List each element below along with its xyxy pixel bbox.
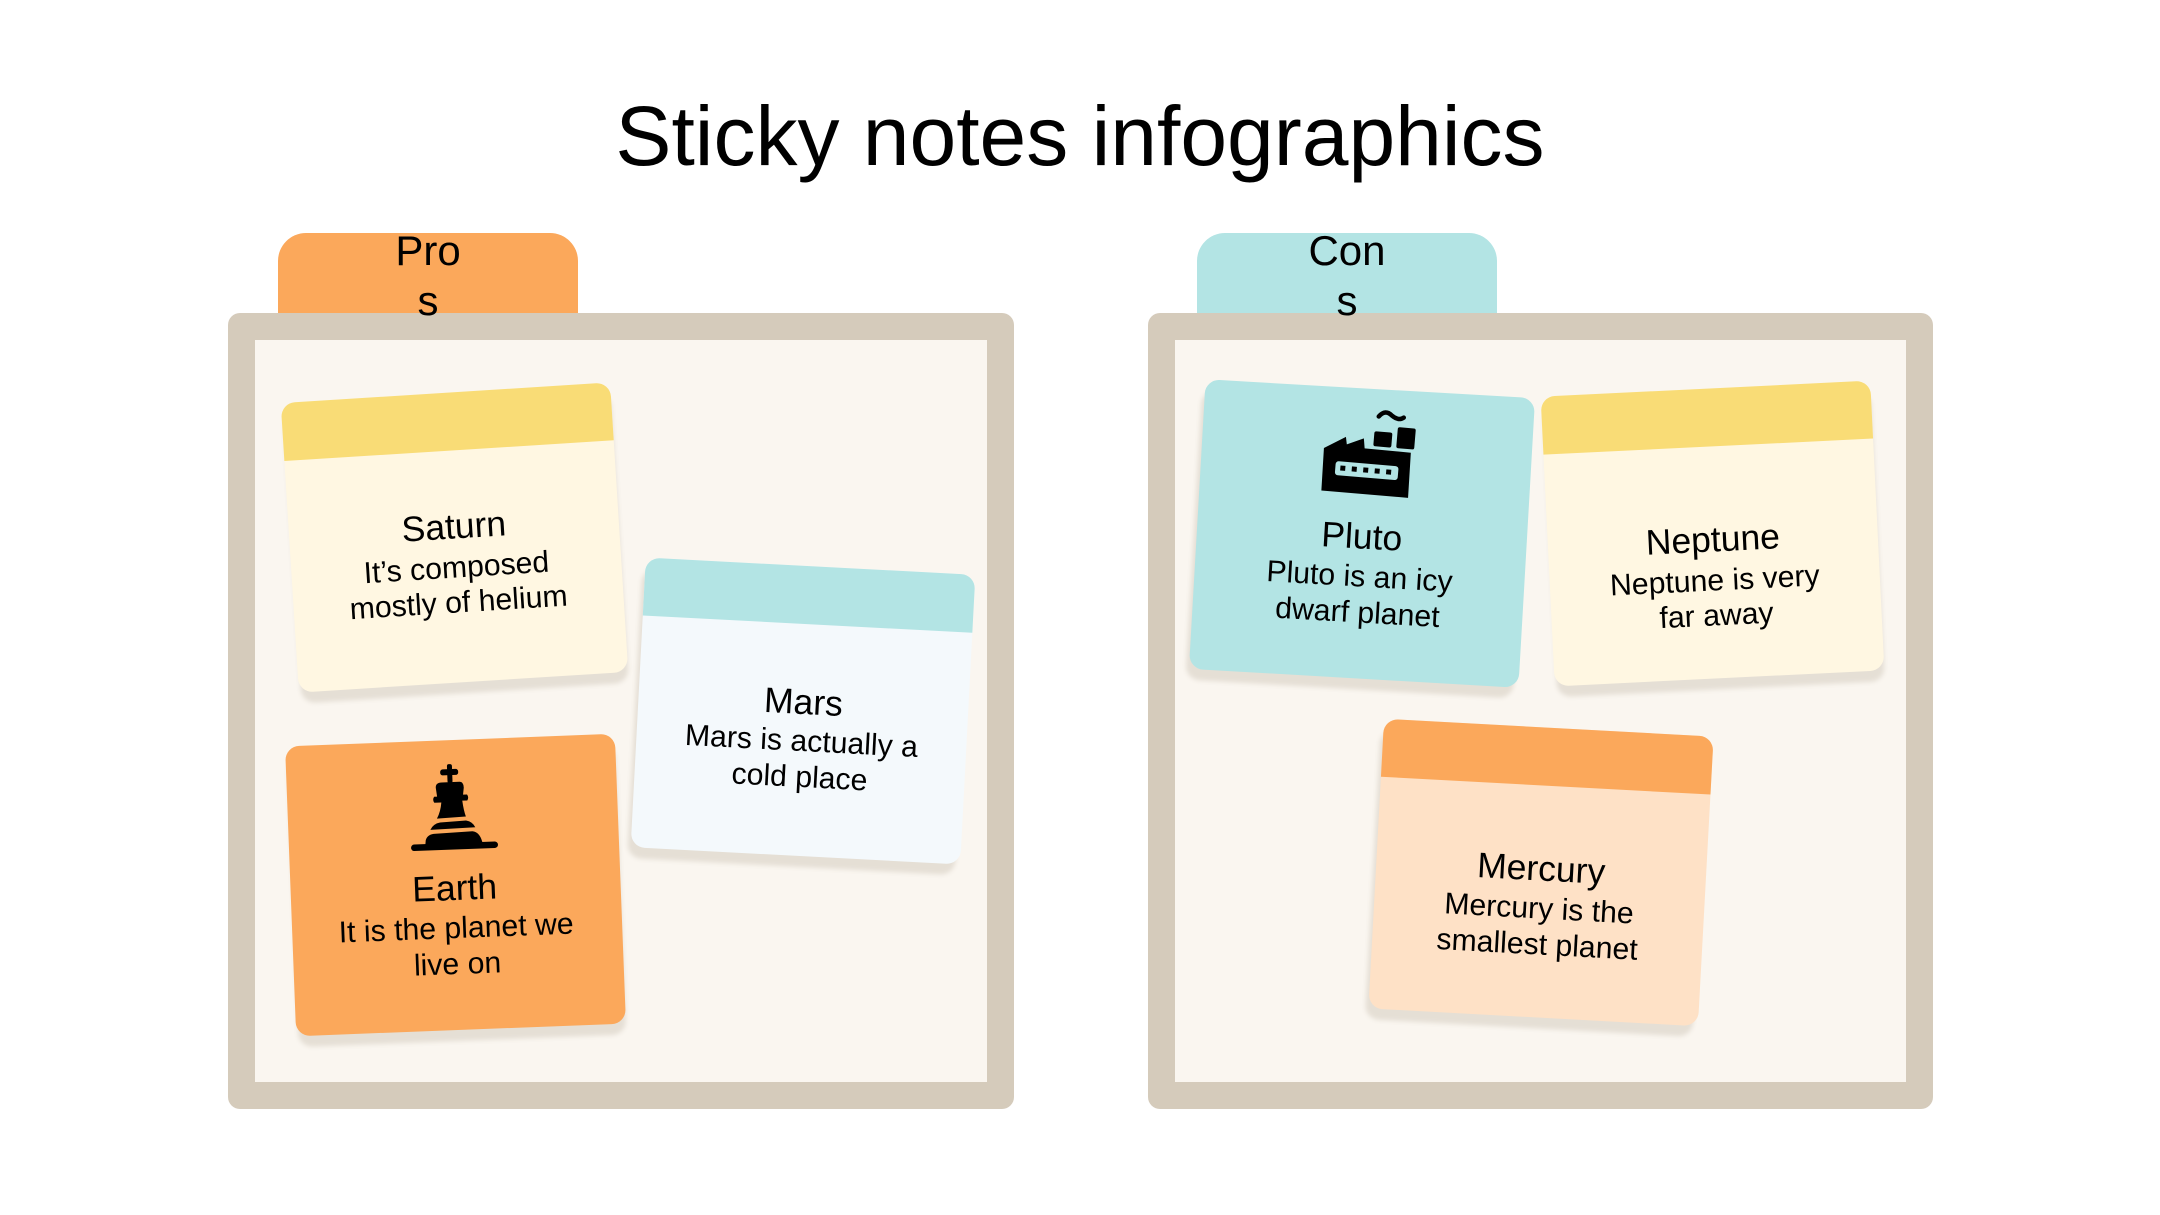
- sticky note: Neptune: far away: [1659, 597, 1775, 635]
- tab: Cons background: [1197, 233, 1497, 343]
- sticky note: Saturn: It’s composed: [363, 546, 550, 590]
- tab: Pros background: [278, 233, 578, 343]
- panel: Cons board: [1148, 313, 1933, 1109]
- sticky note: Pluto: [1185, 379, 1535, 699]
- heading: Cons: s: [1336, 277, 1358, 324]
- sticky note: Saturn: Saturn: [400, 503, 507, 550]
- heading: Cons: Con: [1308, 227, 1386, 274]
- icon: chess king: [408, 762, 498, 851]
- title: Sticky notes infographics: [615, 89, 1545, 183]
- sticky note: Neptune: Neptune is very: [1609, 559, 1821, 603]
- sticky note: Earth: It is the planet we: [338, 908, 574, 950]
- sticky note: Saturn: [281, 382, 629, 704]
- sticky note: Pluto: dwarf planet: [1274, 592, 1441, 634]
- sticky note: Mercury: [1365, 719, 1714, 1037]
- sticky note: Mars: Mars: [763, 680, 844, 724]
- sticky note: Earth: [285, 734, 626, 1047]
- sticky note: Earth: Earth: [411, 866, 498, 910]
- heading: Pros: s: [418, 277, 438, 324]
- sticky note: Neptune: [1541, 381, 1885, 697]
- heading: Cons: [1308, 227, 1386, 324]
- sticky note: Mars: [627, 557, 975, 875]
- sticky note: Pluto: Pluto: [1320, 514, 1403, 559]
- panel: Pros board: [228, 313, 1014, 1109]
- sticky note: Neptune: Neptune: [1645, 516, 1781, 563]
- sticky note: Pluto: Pluto is an icy: [1266, 555, 1454, 599]
- sticky note: Mercury: Mercury: [1476, 845, 1607, 892]
- sticky note: Mars: Mars is actually a: [684, 719, 919, 764]
- heading: Pros: [395, 227, 461, 324]
- icon: factory: [1320, 408, 1417, 498]
- sticky note: Mars: cold place: [731, 757, 868, 797]
- heading: Pros: Pro: [395, 227, 461, 274]
- sticky note: Earth: live on: [413, 946, 502, 983]
- sticky note: Mercury: smallest planet: [1436, 923, 1639, 967]
- sticky note: Mercury: Mercury is the: [1443, 887, 1635, 931]
- sticky note: Saturn: mostly of helium: [349, 580, 568, 626]
